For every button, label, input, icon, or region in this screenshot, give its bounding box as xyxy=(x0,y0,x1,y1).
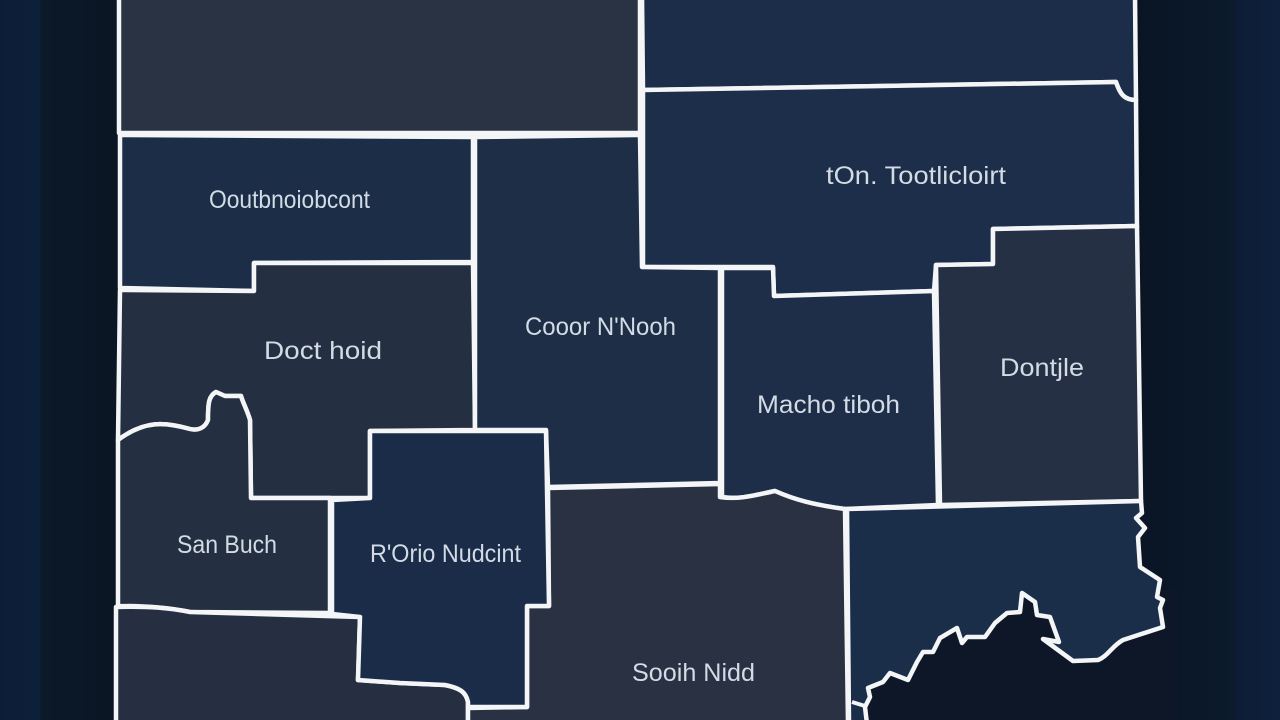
region: east xyxy=(936,226,1141,505)
region: bottom left xyxy=(116,607,468,720)
label: north east: tOn. Tootlicloirt xyxy=(826,162,1006,190)
background right xyxy=(1136,0,1280,720)
gulf water xyxy=(848,590,1178,720)
region: top right xyxy=(642,0,1136,100)
region: river county xyxy=(332,431,549,707)
region: central xyxy=(475,135,720,487)
region: top left xyxy=(119,0,640,133)
label: central: Cooor N'Nooh xyxy=(525,313,676,341)
label: central east: Macho tiboh xyxy=(757,391,900,419)
label: east: Dontjle xyxy=(1000,354,1084,382)
region: south central xyxy=(468,484,848,720)
region: central east xyxy=(722,268,938,509)
region: north east xyxy=(643,82,1137,296)
region: south east coast xyxy=(847,501,1163,720)
label: central west: Doct hoid xyxy=(264,337,382,365)
region: south west xyxy=(118,392,330,613)
label: river county: R'Orio Nudcint xyxy=(370,540,521,568)
background left xyxy=(0,0,118,720)
region: central west xyxy=(118,263,475,498)
region: south west upper xyxy=(120,135,473,291)
coast spur xyxy=(852,702,865,706)
label: south west: San Buch xyxy=(177,531,277,559)
label: south west upper: Ooutbnoiobcont xyxy=(209,186,370,214)
label: south central: Sooih Nidd xyxy=(632,659,755,687)
